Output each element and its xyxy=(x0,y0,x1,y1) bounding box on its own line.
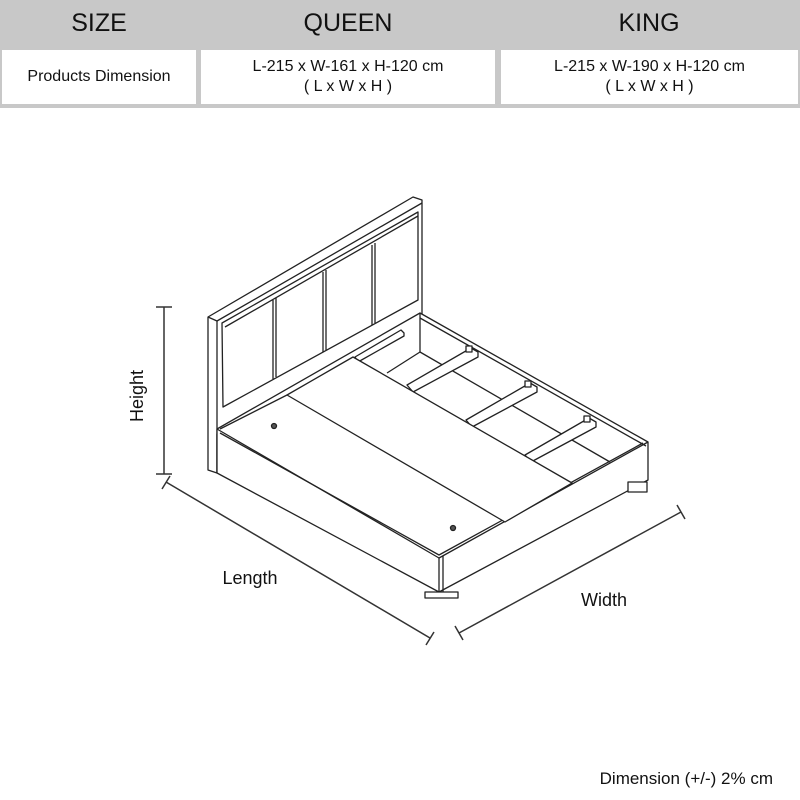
header: king xyxy=(498,0,800,46)
king dimension: ( L x W x H ) xyxy=(605,78,694,95)
platform board xyxy=(287,357,572,522)
width label: Width xyxy=(581,590,627,610)
height dimension xyxy=(156,307,172,474)
headboard xyxy=(208,197,422,473)
knobs xyxy=(272,424,276,428)
length label: Length xyxy=(222,568,278,588)
header: queen: QUEEN xyxy=(304,8,392,36)
queen dimension: L-215 x W-161 x H-120 cm xyxy=(253,58,443,75)
king dimension: L-215 x W-190 x H-120 cm xyxy=(554,58,745,75)
row label: Products Dimension xyxy=(27,68,171,85)
header: size: SIZE xyxy=(71,8,127,36)
queen dimension: ( L x W x H ) xyxy=(304,78,392,95)
slats xyxy=(355,330,404,362)
header: size xyxy=(0,0,198,46)
king dimension xyxy=(499,48,800,106)
length dimension xyxy=(162,476,434,645)
queen dimension xyxy=(199,48,497,106)
table xyxy=(0,0,800,108)
header: queen xyxy=(198,0,498,46)
width dimension xyxy=(455,505,685,640)
height label: Height xyxy=(127,370,147,422)
tolerance note: Dimension (+/-) 2% cm xyxy=(600,769,773,788)
feet xyxy=(425,482,647,598)
row label xyxy=(0,48,198,106)
bed frame xyxy=(217,313,648,592)
header: king: KING xyxy=(618,8,680,36)
